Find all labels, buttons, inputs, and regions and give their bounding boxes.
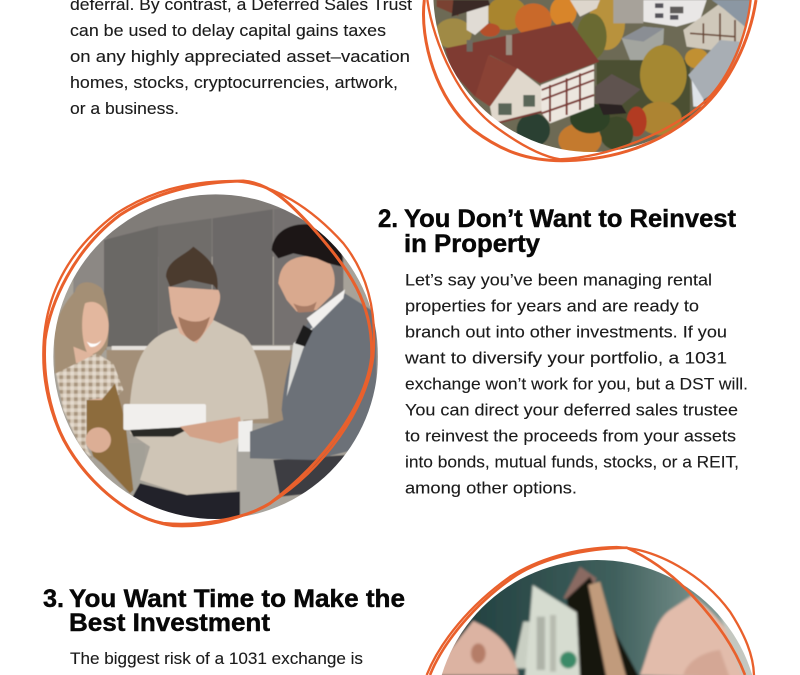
heading: section 2: You Don’t Want to Reinvest <box>404 205 737 233</box>
heading: section 3: 3. <box>43 585 64 613</box>
text block: section 2 body: among other options. <box>405 478 577 498</box>
text block: section 1 ending: homes, stocks, cryptocurrencies, artwork, <box>70 73 398 92</box>
text block: section 2 body: to reinvest the proceeds from your assets <box>405 426 736 446</box>
heading: section 3: Best Investment <box>69 609 271 637</box>
text block: section 2 body: exchange won’t work for you, but a DST will. <box>405 374 748 394</box>
text block: section 2 body: Let’s say you’ve been managing rental <box>405 270 712 290</box>
text block: section 1 ending: or a business. <box>70 99 179 118</box>
text block: section 1 ending: on any highly appreciated asset–vacation <box>70 47 410 66</box>
heading: section 3: You Want Time to Make the <box>69 585 405 613</box>
text block: section 2 body <box>404 270 748 498</box>
text block: section 2 body: properties for years and are ready to <box>405 296 699 316</box>
decorative orange outline: photo 1 <box>423 0 756 161</box>
heading: section 2: in Property <box>404 230 540 258</box>
text block: section 1 ending: can be used to delay capital gains taxes <box>70 21 386 40</box>
heading: section 2: 2. <box>378 205 398 233</box>
text block: section 2 body: You can direct your deferred sales trustee <box>405 400 738 420</box>
text block: section 2 body: branch out into other investments. If you <box>405 322 727 342</box>
text block: section 1 ending <box>70 0 412 118</box>
text block: section 2 body: into bonds, mutual funds, stocks, or a REIT, <box>405 452 739 472</box>
text block: section 2 body: want to diversify your portfolio, a 1031 <box>404 348 727 368</box>
decorative orange outline: photo 2 <box>43 181 374 526</box>
heading: section 3 <box>43 585 405 637</box>
heading: section 2 <box>378 205 737 258</box>
text block: section 3 body: The biggest risk of a 1031 exchange is <box>70 649 363 668</box>
photo: aerial view of village houses in autumn <box>423 0 757 161</box>
decorative orange outline: photo 3 <box>427 547 754 675</box>
photo: three people reviewing a document <box>43 181 383 526</box>
photo: hands opening a wallet with cash <box>427 547 763 675</box>
